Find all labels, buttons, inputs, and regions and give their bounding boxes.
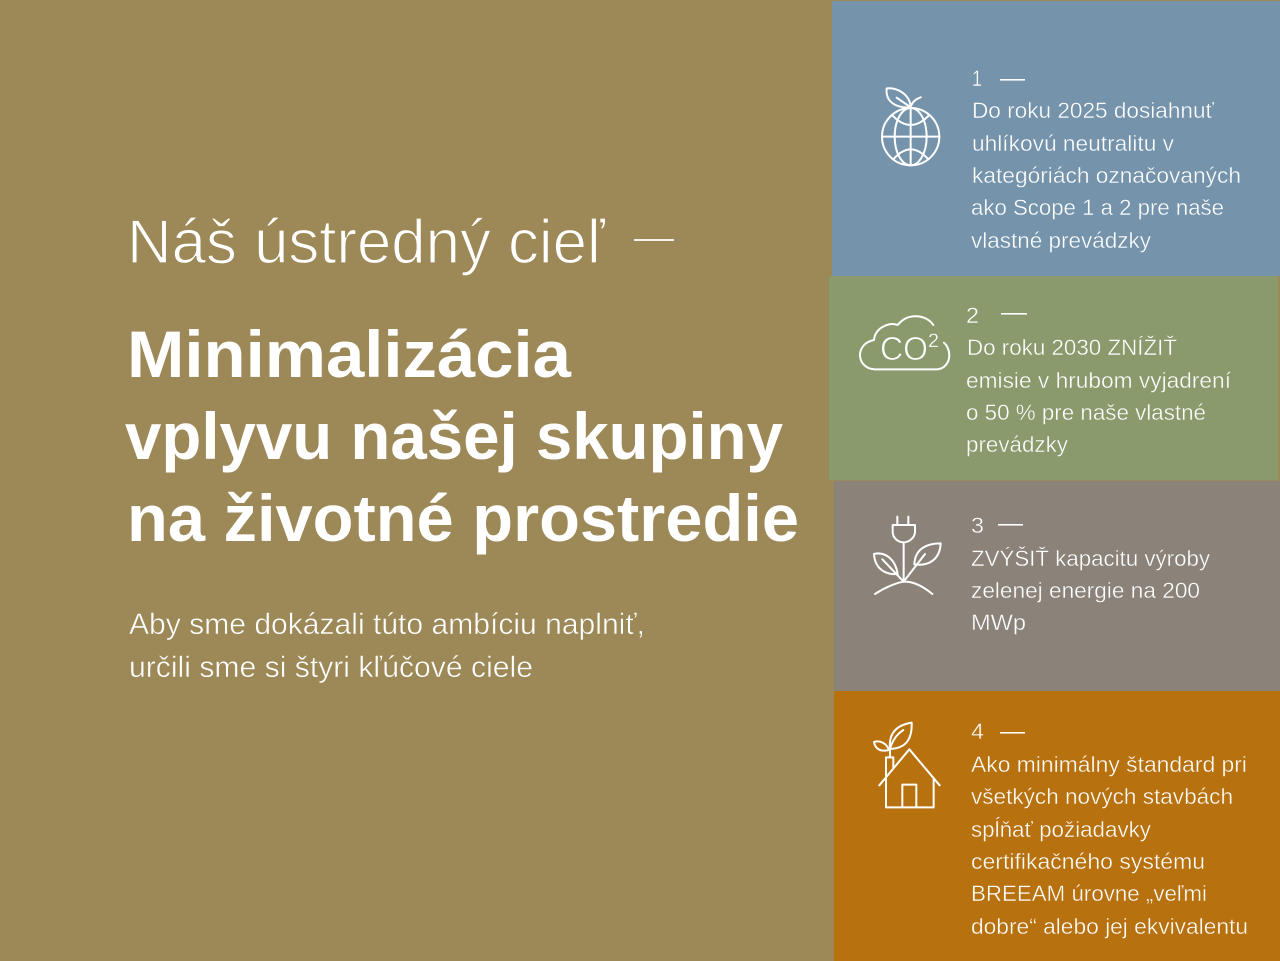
goal 2 text: o 50 % pre naše vlastné: [966, 400, 1206, 425]
icon: apple globe: [882, 88, 939, 165]
goal 4 text: certifikačného systému: [971, 849, 1205, 874]
goal 2 number: 2: [966, 303, 979, 328]
goal 2 text: emisie v hrubom vyjadrení: [966, 368, 1232, 393]
goal 3 text: zelenej energie na 200: [971, 578, 1200, 603]
goal 4 text: všetkých nových stavbách: [971, 784, 1233, 809]
goal 1 text: kategóriách označovaných: [972, 163, 1241, 188]
panel: goal 1: [832, 1, 1280, 276]
goal 1 number: 1: [972, 66, 982, 91]
goal 1 number: [972, 66, 1025, 91]
goal 2 text: [966, 335, 1232, 457]
left intro block: [125, 208, 799, 684]
goal 4 text: dobre“ alebo jej ekvivalentu: [971, 914, 1248, 939]
goal 2 number: [966, 303, 1027, 328]
goal 3 text: MWp: [971, 610, 1026, 635]
panel: goal 4: [834, 691, 1280, 961]
main heading: na životné prostredie: [127, 481, 799, 555]
goal 4 number: 4: [971, 719, 984, 744]
main heading: Minimalizácia: [127, 317, 572, 391]
icon: CO2 cloud: [860, 316, 949, 369]
subtitle: určili sme si štyri kľúčové ciele: [129, 651, 533, 684]
goal 4 number: [971, 719, 1025, 744]
subtitle: [129, 608, 645, 684]
goal 4 text: BREEAM úrovne „veľmi: [971, 881, 1207, 906]
goal 2 text: Do roku 2030 ZNÍŽIŤ: [967, 335, 1177, 360]
icon: plug plant: [874, 517, 941, 594]
goal 4 text: spĺňať požiadavky: [971, 817, 1152, 842]
goal 4 text: Ako minimálny štandard pri: [971, 752, 1247, 777]
goal 1 text: Do roku 2025 dosiahnuť: [972, 98, 1215, 123]
icon: CO2 cloud: CO: [880, 330, 928, 367]
goal 1 text: uhlíkovú neutralitu v: [972, 131, 1175, 156]
goal 1 text: vlastné prevádzky: [971, 228, 1152, 253]
goal 1 text: [971, 98, 1241, 253]
goal 3 number: 3: [971, 513, 984, 538]
goal 2 text: prevádzky: [966, 432, 1069, 457]
eyebrow heading with dash: Náš ústredný cieľ: [127, 208, 606, 277]
panel: goal 2: [829, 276, 1278, 480]
goal 3 number: [971, 513, 1023, 538]
goal 4 text: [971, 752, 1248, 939]
goal 3 text: ZVÝŠIŤ kapacitu výroby: [971, 546, 1211, 571]
goal 1 text: ako Scope 1 a 2 pre naše: [971, 195, 1224, 220]
main heading: [125, 317, 799, 555]
goal 3 text: [971, 546, 1211, 635]
main heading: vplyvu našej skupiny: [125, 399, 783, 473]
panel: goal 3: [834, 481, 1280, 691]
icon: house with leaves: [874, 723, 940, 807]
subtitle: Aby sme dokázali túto ambíciu naplniť,: [129, 608, 645, 641]
icon: CO2 cloud: 2: [928, 331, 939, 352]
